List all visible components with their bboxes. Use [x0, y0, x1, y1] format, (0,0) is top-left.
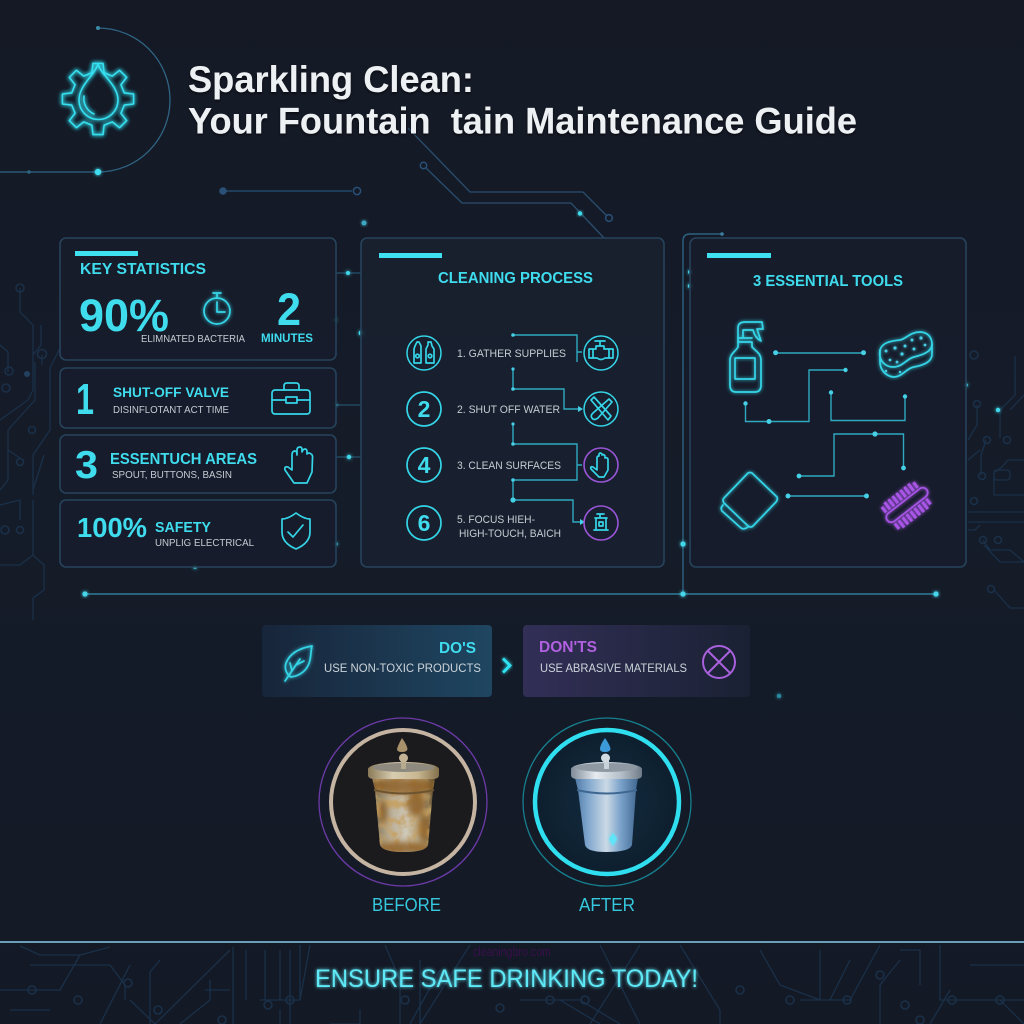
panel: shut-off valve: [60, 368, 336, 428]
step text 5: [457, 514, 561, 540]
step number 2: 2: [418, 396, 430, 422]
before: dirty fountain: [319, 718, 487, 915]
stat: 2 minutes: [261, 284, 313, 345]
heading: key statistics: KEY STATISTICS: [80, 261, 206, 278]
icon: gear with water drop: [62, 63, 134, 135]
step text 5: HIGH-TOUCH, BAICH: [459, 528, 561, 540]
background circuit traces: right edge: [968, 351, 1024, 608]
step number 4: 4: [418, 452, 431, 478]
icon: spray bottle: [730, 322, 763, 392]
icon: hand: [285, 447, 313, 483]
stat: 2 minutes: MINUTES: [261, 331, 313, 345]
header circuit traces: [219, 128, 612, 238]
background circuit traces: left edge: [0, 284, 60, 620]
text: use non-toxic products: USE NON-TOXIC PRODUCTS: [324, 661, 481, 675]
step text 3: 3. CLEAN SURFACES: [457, 460, 561, 472]
step text 5: 5. FOCUS HIEH-: [457, 514, 535, 526]
step icon: crossed tools: [584, 392, 618, 426]
step icon: supplies: [407, 336, 441, 370]
label: before: BEFORE: [372, 895, 441, 915]
panel: safety: [60, 500, 336, 567]
after: clean fountain: [523, 718, 691, 915]
faint footer watermark: cleaningbro.com: [473, 944, 551, 959]
label: after: AFTER: [579, 895, 635, 915]
arrow: do's to don'ts: [503, 658, 510, 672]
title: Sparkling Clean:: [188, 59, 474, 100]
title: Your Fountain tain Maintenance Guide: [188, 100, 857, 142]
icon: cloth: [721, 472, 777, 529]
footer divider line: [0, 941, 1024, 943]
heading: shut-off valve: SHUT-OFF VALVE: [113, 384, 229, 400]
icon: leaf: [285, 646, 312, 681]
step text 2: 2. SHUT OFF WATER: [457, 404, 560, 416]
panel: don'ts: [523, 625, 750, 697]
text: use abrasive materials: USE ABRASIVE MATERIALS: [540, 661, 687, 675]
heading accent bar: [75, 251, 138, 256]
description: spout, buttons, basin: SPOUT, BUTTONS, BASIN: [112, 469, 232, 481]
step number 6: [407, 506, 441, 540]
panel: essential tools: [690, 238, 966, 567]
stat label: eliminated bacteria: ELIMNATED BACTERIA: [141, 333, 245, 345]
process connector circuits: [510, 333, 585, 525]
heading accent bar: [707, 253, 771, 258]
header circuit: arc around logo: [0, 26, 170, 175]
icon: scrub brush: [877, 477, 937, 533]
icon: shield with check: [282, 513, 310, 549]
description: unplug electrical: UNPLIG ELECTRICAL: [155, 537, 254, 549]
step number 6: 6: [418, 510, 430, 536]
stat: 90%: 90%: [79, 290, 169, 341]
background circuit traces: footer: [0, 945, 1024, 1024]
heading: safety: SAFETY: [155, 520, 211, 536]
panel: essential touch areas: [60, 435, 336, 493]
step icon: purple grinder: [584, 506, 618, 540]
heading: cleaning process: CLEANING PROCESS: [438, 270, 593, 287]
title: [188, 59, 857, 142]
heading: don'ts: DON'TS: [539, 639, 597, 656]
number 1: 1: [76, 375, 94, 424]
step number 2: [407, 392, 441, 426]
stat: 2 minutes: 2: [277, 284, 301, 335]
heading: essentuch areas: ESSENTUCH AREAS: [110, 451, 257, 468]
heading: 3 essential tools: 3 ESSENTIAL TOOLS: [753, 273, 903, 290]
step icon: faucet: [584, 336, 618, 370]
clean fountain cup: [571, 738, 642, 852]
icon: stopwatch: [204, 293, 230, 324]
rusty fountain cup: [368, 738, 439, 854]
step icon: purple hand: [584, 448, 618, 482]
step text 1: 1. GATHER SUPPLIES: [457, 348, 566, 360]
icon: x in circle: [703, 646, 735, 678]
icon: sponge: [880, 332, 932, 377]
heading accent bar: [379, 253, 442, 258]
panel: key statistics: [60, 238, 336, 360]
tool connector circuits: [743, 350, 907, 498]
stat: 100%: 100%: [77, 512, 147, 543]
heading: do's: DO'S: [439, 640, 476, 657]
icon: toolbox: [272, 383, 310, 414]
panel connector lines and nodes: [193, 232, 1000, 698]
step number 4: [407, 448, 441, 482]
description: disinfectant act time: DISINFLOTANT ACT TIME: [113, 404, 229, 416]
call to action: ENSURE SAFE DRINKING TODAY!: [315, 965, 698, 993]
panel: cleaning process: [361, 238, 664, 567]
number 3: 3: [75, 444, 98, 487]
panel: do's: [262, 625, 492, 697]
horizontal circuit divider: [82, 591, 939, 597]
